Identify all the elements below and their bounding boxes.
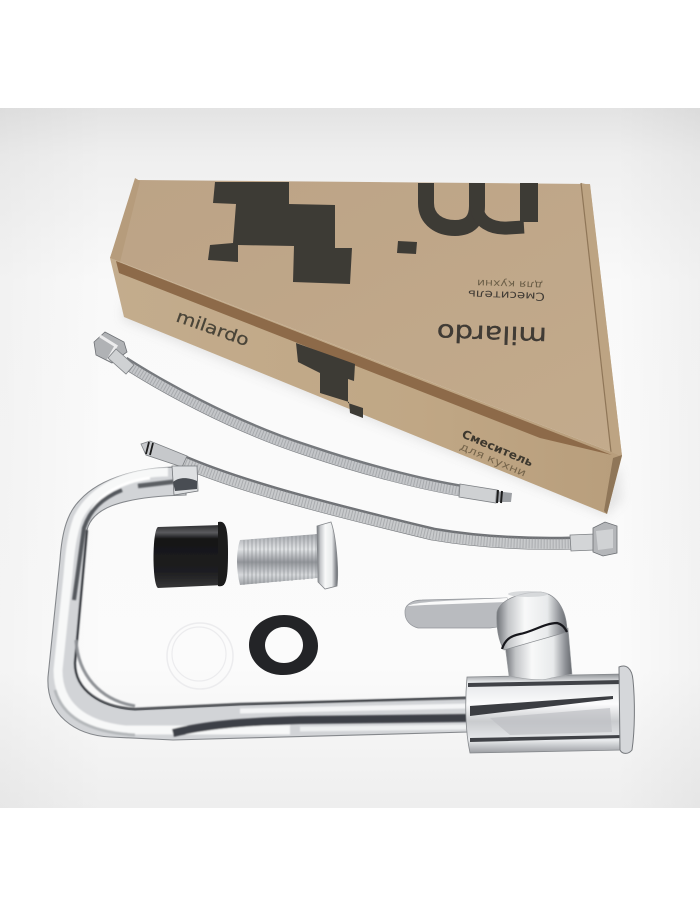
faucet horizontal cylinder	[466, 674, 624, 753]
inverted product label on top: milardo	[436, 318, 547, 350]
cardboard box	[110, 178, 622, 516]
black plastic sleeve	[154, 522, 228, 588]
black joint ring	[502, 623, 567, 649]
large inverted m letter	[426, 183, 529, 228]
black rubber washer	[249, 615, 318, 675]
front face	[110, 258, 622, 514]
braided hose 1	[94, 332, 512, 503]
box top face	[110, 180, 622, 456]
left flap	[110, 178, 140, 262]
dot of logo	[397, 241, 417, 254]
inverted product label on top: для кухни	[477, 277, 543, 290]
hose 2 small end	[141, 441, 187, 467]
dark inner edge strip	[116, 261, 612, 455]
threaded metal connector	[237, 522, 338, 589]
lever handle	[405, 598, 507, 628]
right end of box	[604, 455, 622, 514]
faucet end flange	[619, 666, 634, 753]
pixel logo on front	[296, 343, 363, 418]
hose 1 end fitting	[459, 484, 497, 503]
inverted product label on top	[436, 277, 547, 350]
hose 2 nut	[570, 534, 595, 551]
box shadow	[122, 300, 622, 516]
right flap	[581, 183, 622, 456]
hose 1 connector nut	[94, 332, 127, 363]
faucet vertical stem	[505, 628, 572, 680]
pixel logo on top	[208, 182, 352, 284]
body reflections	[468, 680, 622, 687]
photo background	[0, 108, 700, 808]
clear plastic gasket	[167, 623, 233, 689]
front product label: для кухни	[458, 441, 528, 480]
milardo front logo: milardo	[173, 307, 252, 351]
handle head	[497, 592, 567, 650]
front product label: Смеситель	[460, 427, 535, 469]
spout highlights	[55, 472, 467, 735]
inverted product label on top: Смеситель	[468, 287, 545, 303]
spout tip collar	[172, 466, 198, 495]
faucet body	[405, 591, 634, 753]
braided hose 2	[141, 441, 617, 556]
chrome spout tube	[48, 466, 468, 740]
